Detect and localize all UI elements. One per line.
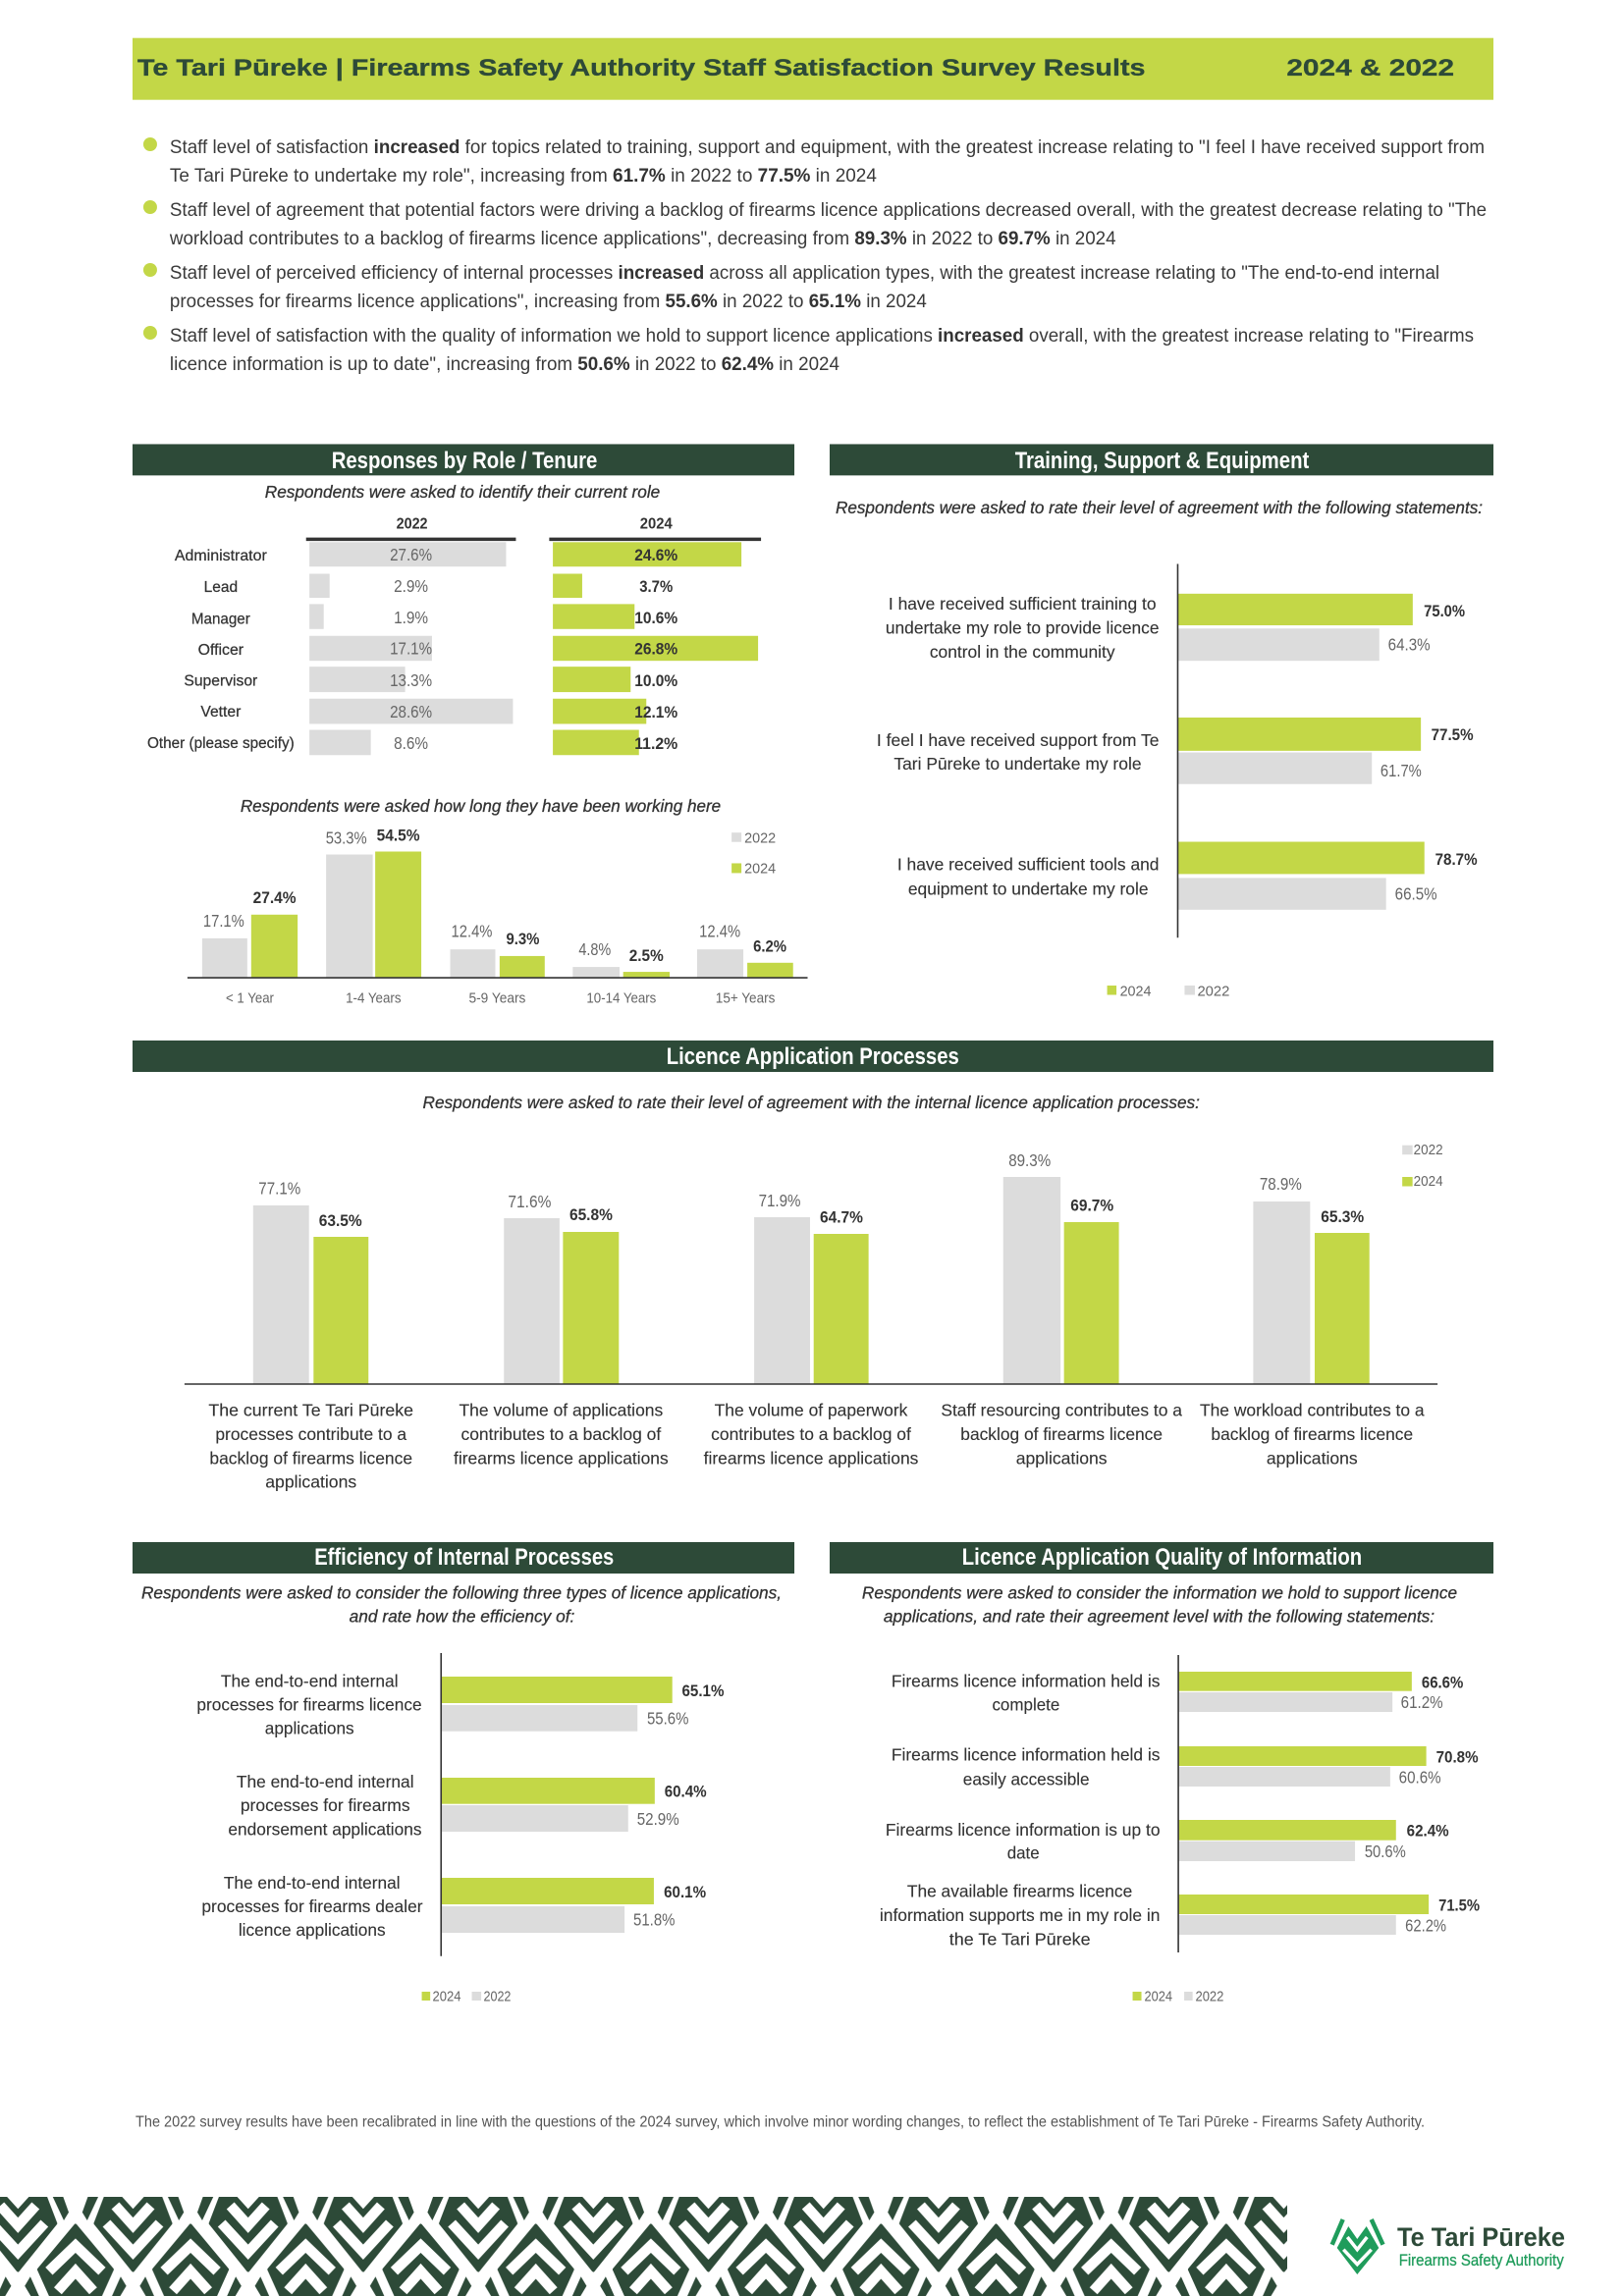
column chart: tenure: 1-4 Years: [346, 989, 402, 1006]
bar chart: training: 61.7%: [1380, 761, 1422, 780]
column chart: tenure: 54.5%: [377, 827, 420, 845]
category labels: processes: backlog of firearms licence: [960, 1424, 1163, 1444]
heading: training, support & equipment: Training, Support & Equipment: [1015, 448, 1309, 474]
column chart: processes: 65.3%: [1321, 1207, 1364, 1226]
icon: logo shield: [1332, 2219, 1382, 2274]
bar chart: training: 78.7%: [1435, 850, 1478, 869]
statement labels: efficiency: processes for firearms dealer: [201, 1896, 423, 1916]
bar chart: quality: 62.4%: [1407, 1822, 1449, 1841]
role table column headers: 2024: [640, 516, 673, 533]
column chart: tenure: 6.2%: [753, 937, 786, 956]
statement labels: efficiency: endorsement applications: [228, 1820, 422, 1840]
bar chart: efficiency: 60.4%: [665, 1783, 707, 1801]
bar chart: quality: 62.2%: [1405, 1916, 1446, 1936]
statement labels: Tari Pūreke to undertake my role: [893, 754, 1142, 774]
title banner: 2024 & 2022: [1286, 55, 1454, 81]
heading: responses by role / tenure: Responses by Role / Tenure: [332, 448, 597, 474]
legend: training chart: 2024: [1120, 983, 1152, 999]
bar chart: roles 2024: 26.8%: [634, 640, 677, 659]
category labels: processes: backlog of firearms licence: [1211, 1424, 1413, 1444]
heading: efficiency of internal processes: [133, 1542, 794, 1574]
bar chart: efficiency: 55.6%: [647, 1709, 688, 1729]
column chart: tenure: 17.1%: [203, 911, 244, 931]
quality question text: [862, 1583, 1457, 1627]
key findings bullet list: Staff level of satisfaction increased for topics related to training, support and equipment, with the greatest increase relating to "I feel I have received support from: [170, 137, 1485, 158]
statement labels: control in the community: [930, 642, 1115, 662]
panel: responses by role and tenure: [133, 444, 808, 1006]
category labels: processes: applications: [1016, 1448, 1108, 1468]
statement labels: quality: [880, 1672, 1161, 1949]
statement labels: quality: Firearms licence information held is: [892, 1745, 1161, 1765]
column chart: processes: 65.8%: [569, 1205, 613, 1224]
legend: tenure chart: [731, 830, 776, 877]
statement labels: efficiency: processes for firearms licence: [196, 1695, 422, 1715]
statement labels: efficiency: licence applications: [239, 1920, 386, 1940]
statement labels: efficiency: processes for firearms: [241, 1795, 410, 1815]
column chart: processes: 64.7%: [820, 1208, 863, 1227]
statement labels: quality: information supports me in my role in: [880, 1905, 1161, 1925]
legend: tenure chart: 2024: [744, 860, 776, 877]
heading: licence application processes: [133, 1041, 1493, 1072]
panel: licence application processes: [133, 1041, 1493, 1491]
efficiency question text: [141, 1583, 782, 1627]
panel: efficiency of internal processes: [133, 1542, 794, 2005]
bar chart: efficiency: 65.1%: [681, 1682, 724, 1700]
statement labels: I have received sufficient tools and: [897, 854, 1160, 874]
legend: training chart: 2022: [1197, 983, 1229, 999]
key findings bullet list: workload contributes to a backlog of firearms licence applications", decreasing from 89.3% in 2022 to 69.7% in 2024: [169, 229, 1116, 249]
statement labels: equipment to undertake my role: [908, 879, 1149, 898]
legend: quality chart: 2024: [1145, 1989, 1172, 2005]
column chart: tenure: 5-9 Years: [468, 989, 525, 1006]
statement labels: I feel I have received support from Te: [877, 730, 1160, 750]
role table column headers: [306, 516, 761, 541]
column chart: processes: 78.9%: [1260, 1174, 1302, 1194]
key findings bullet list: Staff level of satisfaction with the quality of information we hold to support licence applications increased overall, with the greatest increase relating to "Firearms: [170, 326, 1474, 347]
category labels: processes: contributes to a backlog of: [461, 1424, 662, 1444]
category labels: processes: Staff resourcing contributes to a: [941, 1400, 1182, 1419]
category labels: processes: backlog of firearms licence: [209, 1448, 412, 1468]
bar chart: roles 2024: 3.7%: [639, 577, 673, 596]
efficiency question text: Respondents were asked to consider the following three types of licence applications,: [141, 1583, 782, 1603]
bar chart: roles 2022: 27.6%: [390, 545, 432, 564]
statement labels: [877, 594, 1160, 898]
legend: efficiency chart: [422, 1989, 511, 2005]
heading: licence application processes: Licence Application Processes: [667, 1043, 959, 1070]
bar chart: quality: 50.6%: [1365, 1842, 1406, 1861]
legend: processes chart: [1402, 1142, 1443, 1190]
quality question text: Respondents were asked to consider the information we hold to support licence: [862, 1583, 1457, 1603]
category labels: processes: The volume of applications: [460, 1400, 663, 1419]
heading: efficiency of internal processes: Efficiency of Internal Processes: [314, 1544, 614, 1571]
quality question text: applications, and rate their agreement level with the following statements:: [884, 1607, 1435, 1627]
statement labels: efficiency: [196, 1672, 423, 1940]
heading: licence application quality of information: Licence Application Quality of Information: [962, 1544, 1362, 1571]
statement labels: efficiency: The end-to-end internal: [221, 1672, 399, 1691]
column chart: tenure: 12.4%: [699, 922, 740, 941]
training question text: Respondents were asked to rate their level of agreement with the following statements:: [836, 498, 1483, 517]
statement labels: efficiency: applications: [265, 1719, 354, 1738]
role labels: Other (please specify): [147, 735, 295, 752]
bar chart: roles 2024: 24.6%: [634, 546, 677, 564]
logo: Te Tari Pūreke: Te Tari Pūreke: [1397, 2222, 1565, 2252]
footnote: The 2022 survey results have been recalibrated in line with the questions of the 2024 survey, which involve minor wording changes, to reflect the establishment of Te Tari Pūreke - Firearms Safety Authority.: [135, 2114, 1425, 2131]
legend: processes chart: 2024: [1414, 1173, 1443, 1190]
bar chart: roles 2022: 13.3%: [390, 670, 432, 690]
column chart: tenure: 27.4%: [253, 888, 297, 907]
bar chart: roles 2024: 10.0%: [634, 671, 677, 690]
column chart: processes: 63.5%: [319, 1211, 362, 1230]
bar chart: quality: 66.6%: [1422, 1673, 1463, 1691]
heading: training, support & equipment: [830, 444, 1493, 475]
bar chart: efficiency: 52.9%: [637, 1809, 679, 1829]
legend: quality chart: 2022: [1195, 1989, 1223, 2005]
column chart: tenure: < 1 Year: [226, 989, 274, 1006]
bar chart: training: 64.3%: [1388, 635, 1431, 655]
column chart: processes: [185, 1150, 1437, 1384]
statement labels: efficiency: The end-to-end internal: [237, 1772, 414, 1791]
bar chart: training: 66.5%: [1395, 883, 1437, 903]
bar chart: roles 2024: 12.1%: [634, 703, 677, 721]
legend: quality chart: [1133, 1989, 1223, 2005]
category labels: processes: processes contribute to a: [215, 1424, 406, 1444]
heading: licence application quality of information: [830, 1542, 1493, 1574]
column chart: tenure: 9.3%: [506, 930, 539, 948]
category labels: processes: [208, 1400, 1425, 1491]
role labels: Manager: [191, 611, 250, 627]
column chart: tenure: 15+ Years: [716, 989, 775, 1006]
key findings bullet list: Te Tari Pūreke to undertake my role", increasing from 61.7% in 2022 to 77.5% in 2024: [170, 166, 877, 187]
bar chart: efficiency: 60.1%: [664, 1883, 706, 1901]
statement labels: I have received sufficient training to: [889, 594, 1157, 614]
bar chart: roles 2022: 17.1%: [390, 639, 432, 659]
bar chart: training: [1177, 564, 1478, 937]
category labels: processes: applications: [1267, 1448, 1358, 1468]
statement labels: quality: Firearms licence information held is: [892, 1672, 1161, 1691]
role labels: Supervisor: [184, 673, 258, 690]
bar chart: roles 2022: 8.6%: [394, 733, 428, 753]
bar chart: roles 2022: 1.9%: [394, 608, 428, 627]
legend: efficiency chart: 2024: [433, 1989, 461, 2005]
efficiency question text: and rate how the efficiency of:: [350, 1607, 574, 1627]
bar chart: quality: 60.6%: [1399, 1768, 1441, 1788]
statement labels: quality: the Te Tari Pūreke: [949, 1930, 1091, 1949]
role question text: Respondents were asked to identify their current role: [265, 482, 661, 502]
column chart: tenure: 4.8%: [578, 939, 611, 959]
role labels: [147, 548, 295, 752]
title banner: [133, 38, 1493, 100]
category labels: processes: The volume of paperwork: [715, 1400, 908, 1419]
legend: efficiency chart: 2022: [483, 1989, 511, 2005]
legend: training chart: [1108, 983, 1229, 999]
statement labels: quality: The available firearms licence: [907, 1882, 1132, 1901]
bar chart: training: 77.5%: [1432, 725, 1474, 744]
bar chart: roles 2022: 28.6%: [390, 702, 432, 721]
category labels: processes: contributes to a backlog of: [711, 1424, 912, 1444]
bar chart: quality: [1178, 1655, 1480, 1952]
column chart: processes: 69.7%: [1070, 1197, 1113, 1215]
statement labels: efficiency: The end-to-end internal: [224, 1873, 401, 1893]
statement labels: quality: date: [1007, 1842, 1040, 1862]
logo: Te Tari Pūreke: Firearms Safety Authority: [1399, 2251, 1564, 2269]
column chart: tenure: 10-14 Years: [586, 989, 656, 1006]
category labels: processes: The workload contributes to a: [1200, 1400, 1425, 1419]
column chart: tenure: 12.4%: [452, 922, 492, 941]
key findings bullet list: processes for firearms licence applications", increasing from 55.6% in 2022 to 65.1% in 2024: [170, 292, 927, 312]
bar chart: quality: 71.5%: [1438, 1896, 1480, 1915]
bar chart: roles 2024: 10.6%: [634, 609, 677, 627]
bar chart: efficiency: [441, 1653, 724, 1956]
processes question text: Respondents were asked to rate their level of agreement with the internal licence application processes:: [423, 1093, 1200, 1112]
key findings bullet list: licence information is up to date", increasing from 50.6% in 2022 to 62.4% in 2024: [170, 354, 839, 375]
category labels: processes: firearms licence applications: [704, 1448, 918, 1468]
role labels: Vetter: [200, 704, 242, 721]
bar chart: training: 75.0%: [1424, 602, 1465, 620]
statement labels: quality: Firearms licence information is up to: [886, 1820, 1161, 1840]
panel: licence application quality of information: [830, 1542, 1493, 2005]
column chart: processes: 71.9%: [759, 1191, 801, 1210]
heading: responses by role / tenure: [133, 444, 794, 475]
bar chart: roles 2022: 2.9%: [394, 576, 428, 596]
legend: processes chart: 2022: [1414, 1142, 1443, 1158]
key findings bullet list: Staff level of perceived efficiency of internal processes increased across all application types, with the greatest increase relating to "The end-to-end internal: [170, 263, 1439, 284]
legend: tenure chart: 2022: [744, 830, 776, 847]
logo: Te Tari Pūreke: [1332, 2219, 1565, 2274]
key findings bullet list: [143, 137, 1487, 375]
panel: training, support and equipment: [830, 444, 1493, 999]
column chart: processes: 77.1%: [258, 1179, 300, 1199]
tenure question text: Respondents were asked how long they have been working here: [241, 796, 721, 816]
column chart: tenure: [188, 827, 808, 1006]
column chart: tenure: 2.5%: [629, 946, 664, 965]
statement labels: quality: easily accessible: [963, 1770, 1090, 1789]
bar chart: roles 2024: 11.2%: [634, 734, 677, 753]
bar chart: roles 2024: [553, 542, 758, 755]
role table column headers: 2022: [397, 516, 428, 533]
bar chart: efficiency: 51.8%: [633, 1910, 675, 1930]
role labels: Lead: [204, 579, 238, 596]
category labels: processes: The current Te Tari Pūreke: [208, 1400, 413, 1419]
bar chart: quality: 70.8%: [1436, 1748, 1479, 1767]
role labels: Officer: [198, 642, 244, 659]
statement labels: quality: complete: [992, 1695, 1059, 1715]
role labels: Administrator: [175, 548, 267, 564]
footer band: woven chevron pattern: [0, 2197, 1287, 2296]
column chart: tenure: 53.3%: [326, 828, 367, 848]
key findings bullet list: Staff level of agreement that potential factors were driving a backlog of firearms licence applications decreased overall, with the greatest decrease relating to "The: [170, 200, 1487, 221]
bar chart: roles 2022: [309, 542, 513, 755]
bar chart: quality: 61.2%: [1401, 1692, 1443, 1712]
category labels: processes: applications: [265, 1471, 356, 1491]
column chart: processes: 71.6%: [508, 1192, 551, 1211]
category labels: processes: firearms licence applications: [454, 1448, 669, 1468]
column chart: processes: 89.3%: [1008, 1150, 1051, 1170]
statement labels: undertake my role to provide licence: [886, 617, 1160, 637]
title banner: Te Tari Pūreke | Firearms Safety Authority Staff Satisfaction Survey Results: [137, 55, 1146, 81]
